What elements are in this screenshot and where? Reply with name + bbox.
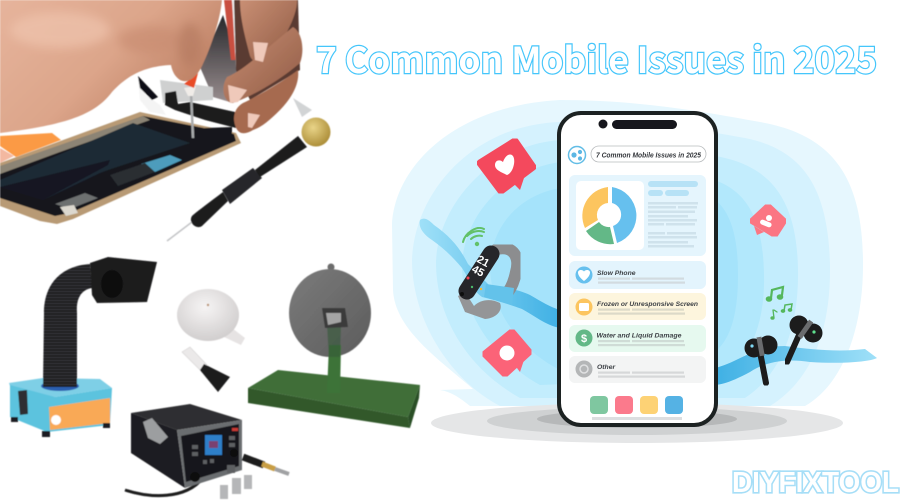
flowing ribbon	[420, 219, 877, 385]
icon: wifi signal	[463, 228, 484, 246]
icon: music notes	[766, 287, 792, 319]
orange pry tool	[0, 133, 61, 157]
hand shading	[10, 12, 202, 67]
nozzle tips	[220, 475, 252, 499]
fingers	[234, 0, 300, 100]
row: Other: Other	[597, 364, 615, 371]
air blower bulb	[177, 289, 245, 345]
chart legend placeholder lines	[648, 181, 698, 248]
earbud: left	[744, 336, 778, 383]
notification: comment card	[485, 332, 529, 374]
watch time	[470, 254, 491, 280]
watch time: 45	[470, 263, 486, 280]
notification: profile card	[752, 206, 784, 235]
small screwdriver	[191, 92, 193, 138]
row: Slow Phone: Slow Phone	[597, 270, 636, 277]
title: 7 Common Mobile Issues in 2025	[316, 32, 877, 84]
photo: smartphone being repaired	[0, 0, 302, 224]
background: concentric blue signal blobs	[392, 100, 863, 406]
precision screwdriver with gold cap	[167, 98, 330, 241]
bottom app buttons	[590, 396, 683, 420]
row: Slow Phone	[569, 261, 706, 289]
earbud: right	[787, 316, 822, 362]
ground shadow ellipses	[431, 403, 843, 443]
hot air rework station	[125, 404, 289, 499]
phone heading pill	[591, 146, 706, 162]
cleaning brush	[182, 347, 230, 392]
hand	[0, 0, 222, 133]
display assembly lifted from the phone	[200, 15, 240, 103]
fume extractor	[9, 257, 157, 437]
icon: comment bubble	[500, 346, 514, 360]
row: Frozen or Unresponsive Screen: Frozen or Unresponsive Screen	[597, 301, 698, 308]
row: Water and Liquid Damage	[569, 325, 706, 352]
green suction cup stand	[248, 264, 420, 428]
icon: heart	[495, 155, 514, 175]
phone heading pill: 7 Common Mobile Issues in 2025	[596, 150, 702, 160]
row: Water and Liquid Damage: Water and Liquid Damage	[596, 332, 682, 340]
row: Other	[569, 356, 706, 383]
row: Water and Liquid Damage: $	[581, 333, 587, 345]
phone camera and speaker	[598, 120, 677, 129]
red and white flex strip	[224, 0, 238, 60]
smart band	[458, 248, 517, 319]
icon: profile	[759, 215, 772, 228]
donut chart	[582, 187, 636, 244]
chart card	[569, 175, 706, 256]
app logo icon	[568, 146, 586, 164]
opened phone body	[0, 112, 241, 224]
phone mockup	[559, 113, 716, 425]
row: Frozen or Unresponsive Screen	[569, 293, 706, 320]
watch time: 21	[475, 254, 491, 270]
notification: heart card	[480, 141, 533, 191]
